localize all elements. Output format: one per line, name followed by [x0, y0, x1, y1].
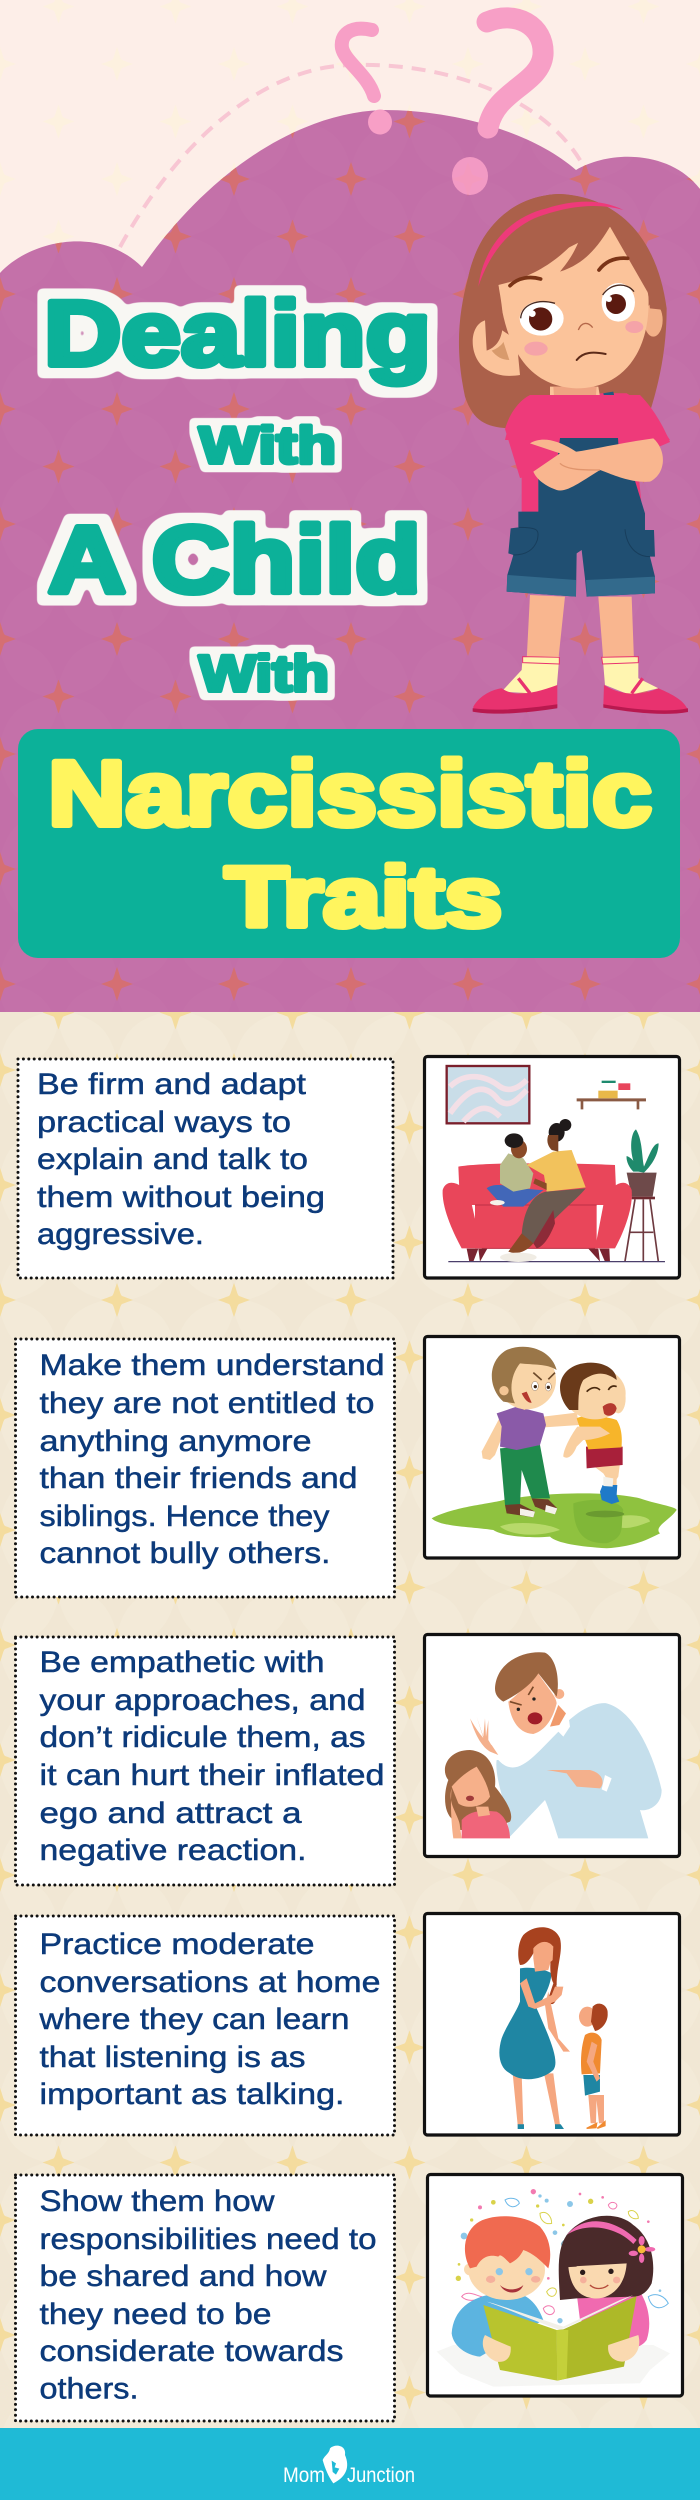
panel: tip 1 text: aggressive.	[37, 1218, 204, 1251]
panel: tip 2 text: Make them understand	[40, 1349, 384, 1382]
panel: tip 5 text: Show them how	[40, 2185, 275, 2218]
panel: tip 4 text	[16, 1916, 394, 2135]
panel: tip 4 text: that listening is as	[40, 2041, 306, 2074]
panel: tip 5 illustration, children reading a book	[428, 2174, 682, 2396]
panel: tip 1 text	[18, 1059, 393, 1278]
panel: tip 1 text: them without being	[37, 1181, 325, 1214]
title: A Child: A Child	[48, 507, 421, 613]
title: Dealing: Dealing	[44, 283, 431, 385]
panel: tip 2 text: than their friends and	[40, 1462, 358, 1495]
panel: tip 3 text: Be empathetic with	[40, 1646, 324, 1679]
panel: tip 5 text: others.	[40, 2372, 138, 2406]
footer logo: MomJunction	[283, 2446, 415, 2487]
panel: tip 4 text: conversations at home	[40, 1966, 380, 1999]
panel: tip 4 illustration, mother talking to son	[424, 1914, 680, 2135]
panel: tip 2 text: siblings. Hence they	[40, 1500, 330, 1533]
header background	[0, 0, 700, 1012]
icon: big question mark	[452, 18, 543, 195]
panel: tip 3 text: ego and attract a	[40, 1797, 302, 1830]
title banner: Narcissistic Traits: Narcissistic	[48, 743, 652, 845]
cream patterned background	[0, 1012, 700, 2428]
panel: tip 4 text: important as talking.	[40, 2078, 344, 2111]
panel: tip 2 text: cannot bully others.	[40, 1537, 330, 1570]
panel: tip 1 text: explain and talk to	[37, 1143, 308, 1176]
footer logo: MomJunction: Junction	[347, 2464, 415, 2487]
panel: tip 3 illustration, parent scolding girl	[424, 1634, 680, 1856]
panel: tip 3 text	[16, 1637, 394, 1885]
panel: tip 5 text	[16, 2175, 394, 2421]
purple cloud shape	[0, 110, 700, 1012]
panel: tip 4 text: where they can learn	[38, 2003, 349, 2036]
dashed arc	[120, 65, 585, 247]
title banner: Narcissistic Traits: Traits	[225, 850, 502, 944]
panel: tip 1 illustration, mother and child on sofa	[424, 1056, 680, 1278]
panel: tip 2 text: they are not entitled to	[40, 1387, 374, 1420]
panel: tip 5 text: they need to be	[40, 2298, 272, 2331]
illustration: girl with crossed arms	[459, 194, 688, 714]
panel: tip 5 text: considerate towards	[40, 2335, 344, 2368]
panel: tip 1 text: Be firm and adapt	[37, 1068, 307, 1101]
footer bar	[0, 2428, 700, 2500]
icon: small question mark	[342, 29, 392, 134]
panel: tip 3 text: don’t ridicule them, as	[40, 1721, 366, 1754]
title: With (second): With	[199, 645, 329, 702]
panel: tip 3 text: your approaches, and	[40, 1684, 366, 1717]
panel: tip 4 text: Practice moderate	[40, 1928, 314, 1961]
panel: tip 1 text: practical ways to	[37, 1106, 291, 1139]
panel: tip 2 text	[16, 1339, 394, 1597]
title: With: With	[199, 417, 336, 475]
footer logo: MomJunction: Mom	[283, 2464, 325, 2487]
panel: tip 3 text: it can hurt their inflated	[40, 1759, 384, 1792]
title banner: Narcissistic Traits	[18, 729, 680, 958]
panel: tip 2 text: anything anymore	[40, 1425, 312, 1458]
panel: tip 5 text: responsibilities need to	[40, 2223, 376, 2256]
panel: tip 3 text: negative reaction.	[40, 1834, 306, 1867]
panel: tip 2 illustration, boy bullying another	[424, 1336, 680, 1558]
panel: tip 5 text: be shared and how	[40, 2260, 327, 2293]
